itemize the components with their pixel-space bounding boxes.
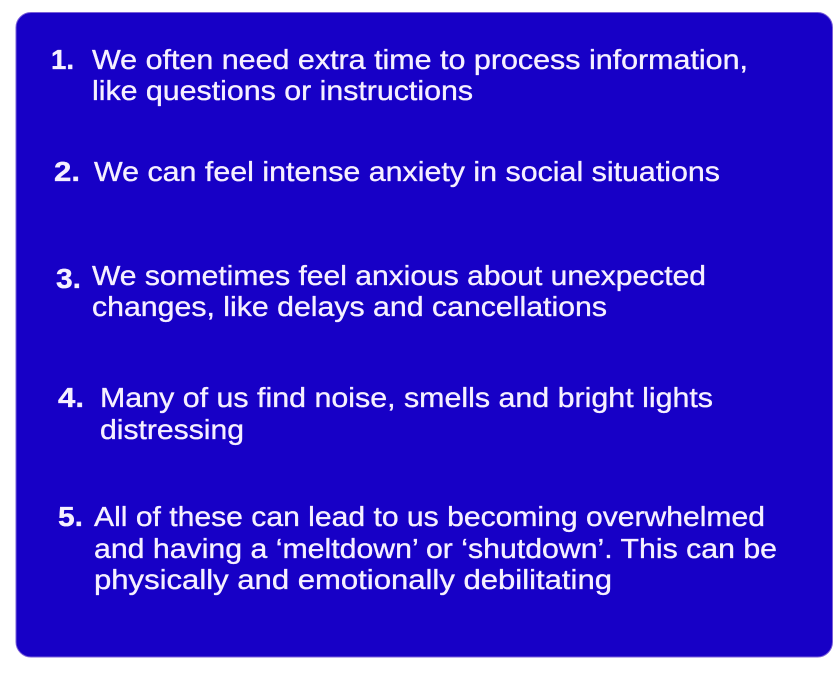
list item 3 [56,260,706,322]
list item 1 [51,44,748,106]
list item 2: We can feel intense anxiety in social situations [94,156,720,187]
list item 3: 3. [56,263,81,294]
list item 5 [58,501,777,595]
list item 4 [58,382,713,445]
list item 5: and having a ‘meltdown’ or ‘shutdown’. This can be [94,533,777,564]
list item 2: 2. [54,156,80,187]
list item 3: We sometimes feel anxious about unexpected [92,260,706,291]
list item 4: distressing [100,414,244,445]
list item 3: changes, like delays and cancellations [92,291,607,322]
list item 1: 1. [51,44,74,75]
list item 4: Many of us find noise, smells and bright lights [100,382,713,413]
list item 4: 4. [58,382,84,413]
list item 5: 5. [58,501,83,532]
list item 1: like questions or instructions [92,75,473,106]
list item 1: We often need extra time to process information, [92,44,748,75]
list item 5: All of these can lead to us becoming overwhelmed [94,501,765,532]
list item 5: physically and emotionally debilitating [94,564,612,595]
